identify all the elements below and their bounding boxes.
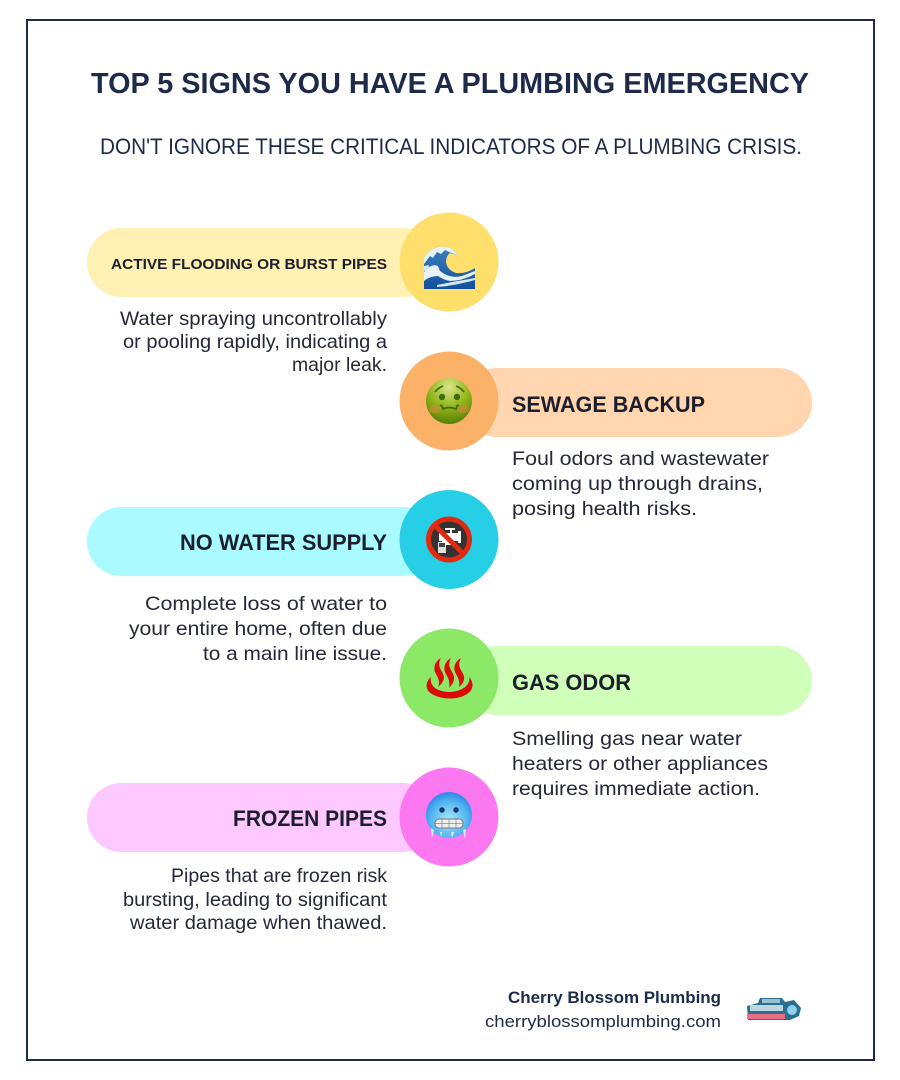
circle: gas <box>400 628 498 728</box>
description: gas: heaters or other appliances <box>512 753 768 775</box>
circle: sewage <box>400 352 498 450</box>
panel: active flooding or burst pipes <box>87 212 498 376</box>
heading pill: frozen <box>87 783 437 852</box>
description: flooding: major leak. <box>292 354 387 376</box>
heading: gas: GAS ODOR <box>512 670 631 695</box>
description: no water: to a main line issue. <box>203 643 387 665</box>
footer website: cherryblossomplumbing.com <box>485 1012 721 1031</box>
icon: company logo <box>747 998 801 1020</box>
panel: sewage backup <box>400 352 812 520</box>
footer company name: Cherry Blossom Plumbing <box>508 989 721 1007</box>
panel: gas odor <box>400 628 812 800</box>
panel: no water supply <box>87 490 498 665</box>
description: flooding: or pooling rapidly, indicating a <box>123 331 387 353</box>
subtitle: DON'T IGNORE THESE CRITICAL INDICATORS OF A PLUMBING CRISIS. <box>100 134 802 159</box>
circle: no water <box>400 490 498 589</box>
icon: nauseated face <box>426 378 472 424</box>
description: sewage: Foul odors and wastewater <box>512 448 770 470</box>
circle: frozen <box>400 768 498 866</box>
icon: cold face <box>426 792 472 839</box>
heading: flooding: ACTIVE FLOODING OR BURST PIPES <box>111 256 387 273</box>
circle: flooding <box>400 212 498 312</box>
title: TOP 5 SIGNS YOU HAVE A PLUMBING EMERGENCY <box>91 68 809 100</box>
description: no water <box>129 593 387 665</box>
description: frozen: bursting, leading to significant <box>123 889 388 911</box>
heading pill: no water <box>87 507 437 576</box>
description: sewage: posing health risks. <box>512 498 697 520</box>
panel: frozen pipes <box>87 768 498 934</box>
heading pill: flooding <box>87 228 437 297</box>
description: sewage <box>512 448 770 520</box>
description: gas: Smelling gas near water <box>512 728 743 750</box>
icon: non-potable water <box>426 516 472 562</box>
description: flooding <box>120 308 387 376</box>
description: flooding: Water spraying uncontrollably <box>120 308 387 330</box>
description: no water: Complete loss of water to <box>145 593 387 615</box>
description: gas: requires immediate action. <box>512 778 760 800</box>
description: frozen: water damage when thawed. <box>129 912 387 934</box>
heading pill: gas <box>462 646 812 715</box>
heading: sewage: SEWAGE BACKUP <box>512 392 705 417</box>
description: gas <box>512 728 768 800</box>
description: frozen: Pipes that are frozen risk <box>171 865 387 887</box>
heading pill: sewage <box>462 368 812 437</box>
description: sewage: coming up through drains, <box>512 473 763 495</box>
icon: wave <box>424 247 475 289</box>
description: frozen <box>123 865 388 934</box>
heading: frozen: FROZEN PIPES <box>233 806 387 831</box>
icon: hot springs <box>427 658 473 698</box>
heading: no water: NO WATER SUPPLY <box>180 530 387 555</box>
description: no water: your entire home, often due <box>129 618 387 640</box>
